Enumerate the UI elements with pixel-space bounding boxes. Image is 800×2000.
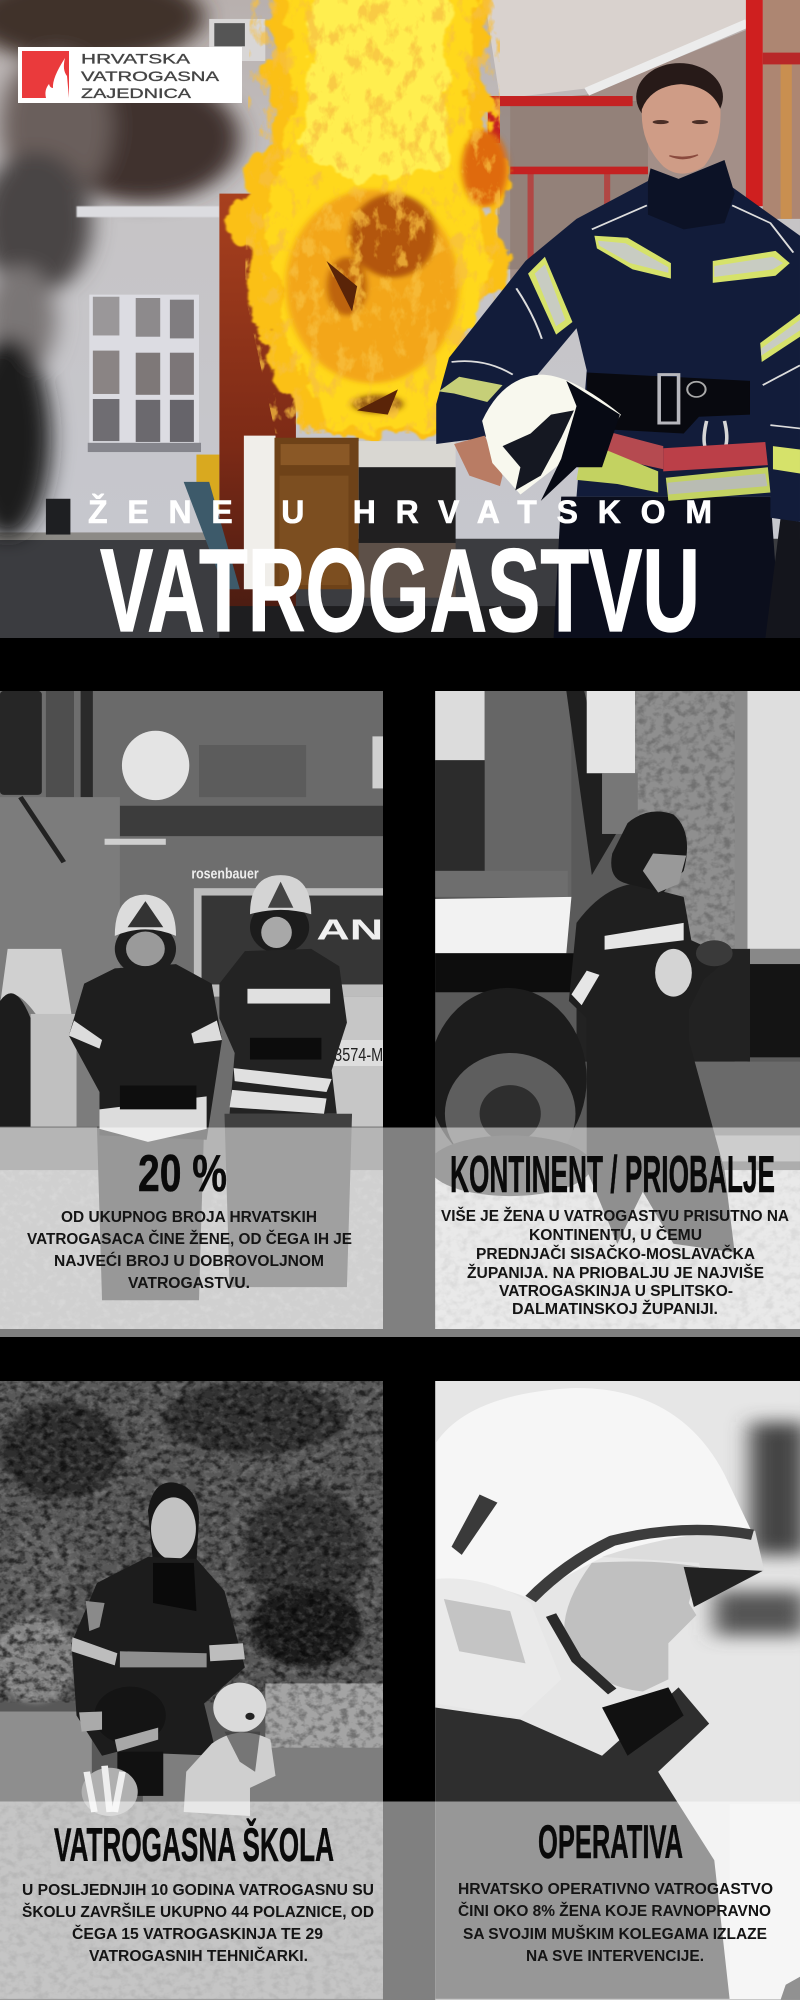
text block: operativa: NA SVE INTERVENCIJE. xyxy=(526,1948,704,1965)
text block: vatrogasna škola: ŠKOLU ZAVRŠILE UKUPNO 44 POLAZNICE, OD xyxy=(22,1902,374,1921)
text block: 20 %: OD UKUPNOG BROJA HRVATSKIH xyxy=(61,1209,317,1226)
hero subtitle: ŽENE U HRVATSKOM xyxy=(88,494,712,530)
logo: Hrvatska vatrogasna zajednica: HRVATSKA xyxy=(81,50,191,66)
text block: kontinent / priobalje: VIŠE JE ŽENA U VATROGASTVU PRISUTNO NA xyxy=(441,1206,789,1225)
panel photo: firefighter leaning on truck xyxy=(429,691,800,1333)
text block: kontinent / priobalje: DALMATINSKOJ ŽUPANIJI. xyxy=(512,1299,718,1318)
text block: 20 %: VATROGASTVU. xyxy=(128,1275,250,1292)
logo: Hrvatska vatrogasna zajednica xyxy=(18,47,242,103)
text block: vatrogasna škola: ČEGA 15 VATROGASKINJA TE 29 xyxy=(72,1924,323,1943)
text block: operativa: HRVATSKO OPERATIVNO VATROGASTVO xyxy=(458,1881,773,1898)
text block: 20 %: NAJVEĆI BROJ U DOBROVOLJNOM xyxy=(54,1251,324,1270)
translucent band: bottom row xyxy=(0,1802,800,2000)
text block: kontinent / priobalje: KONTINENTU, U ČEMU xyxy=(529,1225,702,1244)
hero photo: firefighter in front of flames xyxy=(0,0,800,639)
panel photo: firefighter with dog xyxy=(0,1381,383,2000)
truck lettering: rosenbauer xyxy=(191,866,259,882)
text block: kontinent / priobalje: VATROGASKINJA U SPLITSKO- xyxy=(499,1283,733,1300)
text block: kontinent / priobalje: ŽUPANIJA. NA PRIOBALJU JE NAJVIŠE xyxy=(467,1263,764,1282)
text block: kontinent / priobalje: PREDNJAČI SISAČKO-MOSLAVAČKA xyxy=(476,1244,755,1263)
text block: vatrogasna škola: U POSLJEDNJIH 10 GODINA VATROGASNU SU xyxy=(22,1882,374,1899)
panel photo: two firefighters at truck: AN xyxy=(316,914,383,946)
panel photo: firefighter in helmet portrait xyxy=(435,1381,800,2000)
text block: operativa: SA SVOJIM MUŠKIM KOLEGAMA IZLAZE xyxy=(463,1924,767,1943)
logo: Hrvatska vatrogasna zajednica: VATROGASNA xyxy=(81,68,220,84)
panel photo: two firefighters at truck: 3574-M xyxy=(334,1045,383,1065)
text block: 20 % xyxy=(27,1145,352,1292)
text block: 20 %: VATROGASACA ČINE ŽENE, OD ČEGA IH JE xyxy=(27,1229,352,1248)
icon: flame xyxy=(45,58,69,98)
text block: 20 %: 20 % xyxy=(138,1145,227,1203)
text block: operativa xyxy=(458,1815,773,1965)
text block: kontinent / priobalje xyxy=(441,1146,789,1318)
text block: operativa: OPERATIVA xyxy=(538,1815,683,1868)
translucent band: top row xyxy=(0,1128,800,1337)
logo: Hrvatska vatrogasna zajednica: ZAJEDNICA xyxy=(81,85,192,101)
text block: vatrogasna škola: VATROGASNA ŠKOLA xyxy=(54,1818,334,1871)
panel photo: two firefighters at truck xyxy=(0,691,383,1333)
text block: vatrogasna škola: VATROGASNIH TEHNIČARKI. xyxy=(89,1946,308,1965)
text block: vatrogasna škola xyxy=(22,1818,374,1965)
text block: operativa: ČINI OKO 8% ŽENA KOJE RAVNOPRAVNO xyxy=(458,1901,771,1920)
